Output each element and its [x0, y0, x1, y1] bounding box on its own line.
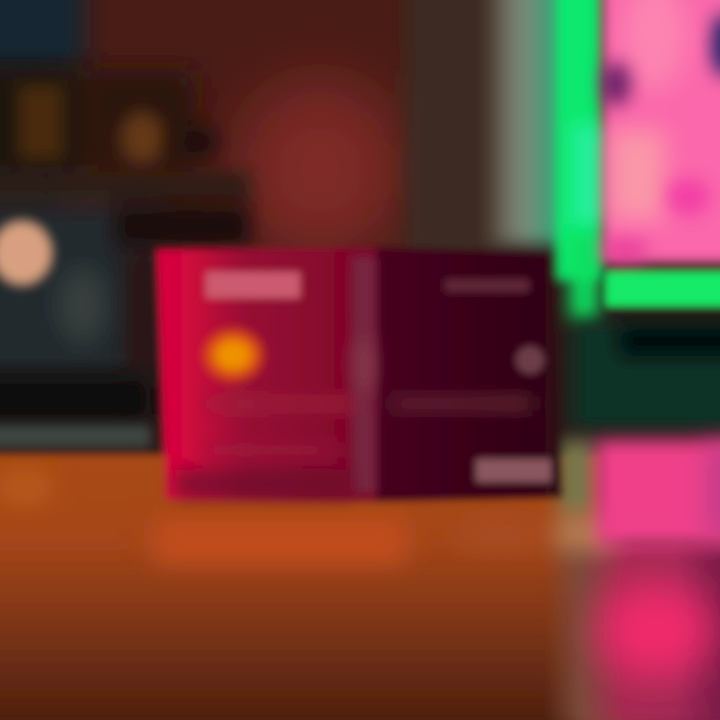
- credit card: [157, 247, 563, 502]
- card contactless mark: [516, 346, 544, 374]
- horizontal green bar: [606, 272, 720, 306]
- vertical green glow: [556, 0, 600, 280]
- top right navy: [711, 13, 720, 77]
- card left half: [157, 247, 376, 502]
- dark notch: [601, 62, 631, 106]
- icon: glowing lamp: [0, 221, 52, 285]
- neon sign: [490, 0, 720, 320]
- card logo: [206, 272, 300, 298]
- table surface: [0, 455, 600, 720]
- card lower shading: [175, 470, 350, 498]
- card number line right: [392, 396, 530, 411]
- pink reflection: [545, 440, 720, 720]
- card right half: [376, 247, 563, 502]
- shelf area: [0, 0, 250, 447]
- pink rabbit field: [604, 0, 720, 262]
- card top-right label: [445, 279, 529, 292]
- dark teal band: [572, 322, 720, 430]
- card chip: [203, 329, 263, 381]
- card fold highlight: [352, 256, 376, 494]
- card network logo: [476, 459, 551, 482]
- grey to green gradient band: [490, 0, 580, 245]
- card name line: [205, 442, 335, 458]
- card number line left: [205, 396, 355, 412]
